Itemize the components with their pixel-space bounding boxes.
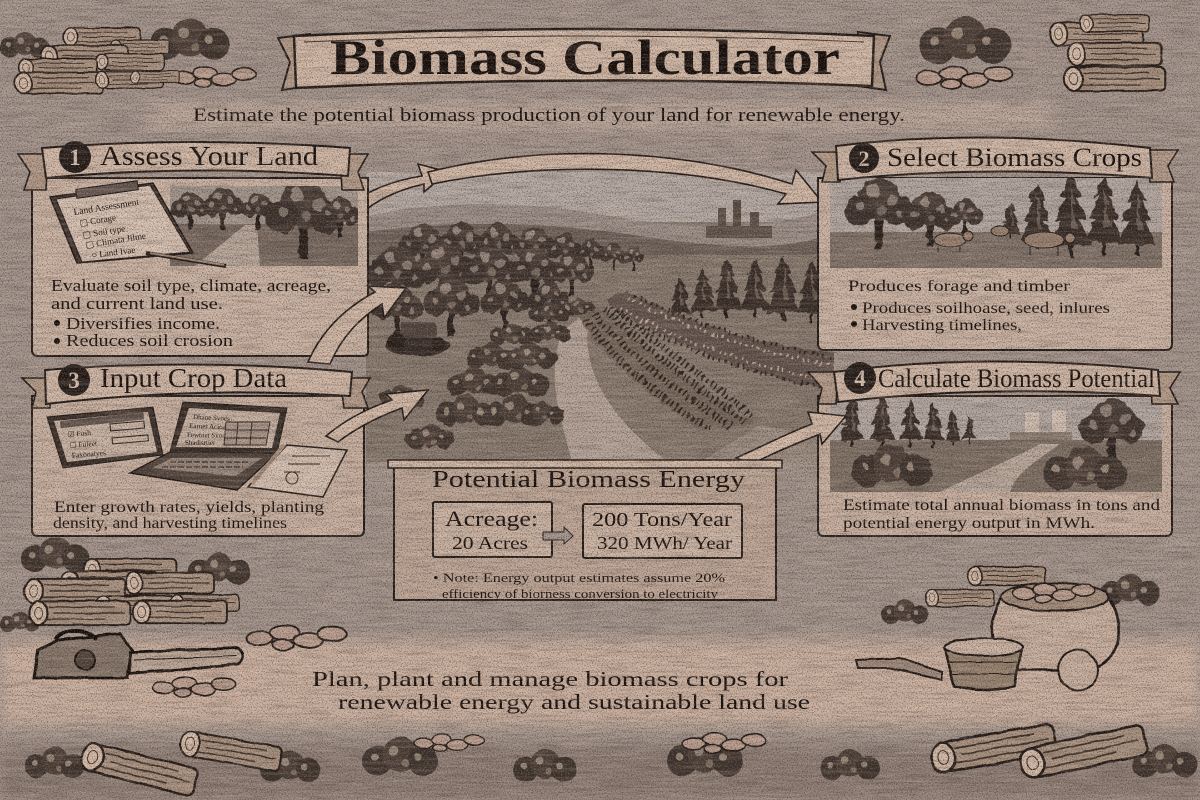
- heading ribbon: step 3: Input Crop Data: [100, 363, 287, 393]
- icon: chainsaw: [34, 631, 243, 678]
- title banner: [278, 29, 890, 90]
- icon: tablet with form: ☐ Fuleet: [69, 439, 98, 450]
- decoration: bottom logs and foliage: [25, 723, 1197, 797]
- title banner: Biomass Calculator: [330, 29, 840, 85]
- icon: clipboard checklist: ○ Land Ivae: [91, 245, 136, 260]
- heading ribbon: step 3: 3: [68, 368, 80, 393]
- heading ribbon: step 1: Assess Your Land: [100, 141, 319, 171]
- card: acreage: 20 Acres: [452, 533, 528, 553]
- farmland ground: [366, 255, 834, 462]
- panel: step 4 calculate biomass potential: [818, 394, 1172, 536]
- icon: clipboard checklist: ▢ Corage: [79, 212, 117, 228]
- orchard rows: [366, 221, 828, 336]
- icon: clipboard checklist: ▢ Soil type: [82, 223, 126, 240]
- closing message: [312, 667, 810, 714]
- arrow: land to landscape: [344, 164, 448, 220]
- icon: clipboard notes: [248, 445, 347, 497]
- crop rows: [436, 290, 834, 430]
- body text: and current land use.: [51, 294, 223, 313]
- basket: [945, 638, 1023, 690]
- heading: Potential Biomass Energy: [432, 467, 745, 493]
- heading ribbon: step 4: [808, 361, 1180, 404]
- power plant: [706, 200, 772, 238]
- note: • Note: Energy output estimates assume 20%: [433, 570, 725, 585]
- card: acreage: Acreage:: [445, 506, 538, 531]
- body text: [843, 497, 1160, 532]
- note: [433, 570, 725, 601]
- central landscape illustration: [366, 172, 834, 462]
- heading ribbon: step 1: 1: [69, 145, 81, 170]
- icon: laptop with spreadsheet: Dhane Svoes: [193, 413, 230, 423]
- card: acreage: [433, 502, 552, 557]
- decoration: sack of wood chips and basket: [856, 567, 1160, 690]
- left foreground shrubs: [380, 385, 454, 449]
- icon: clipboard checklist: ▢ Climata Jilme: [85, 231, 147, 250]
- arrow: crop data to landscape upper: [308, 286, 406, 364]
- body text: Produces forage and timber: [848, 278, 1071, 295]
- heading ribbon: step 4: Calculate Biomass Potential: [878, 364, 1155, 393]
- closing message: Plan, plant and manage biomass crops for: [312, 667, 788, 691]
- body text: Estimate total annual biomass in tons and: [843, 497, 1160, 514]
- sack: [992, 583, 1119, 670]
- heading ribbon: step 4: 4: [854, 366, 866, 391]
- body text: potential energy output in MWh.: [843, 515, 1095, 532]
- card: results: 320 MWh/ Year: [597, 533, 732, 553]
- decoration: stones left: [153, 626, 347, 697]
- body text: density, and harvesting timelines: [53, 515, 287, 532]
- icon: clipboard checklist: Land Assessment: [73, 198, 140, 218]
- decoration: top right logs and foliage: [916, 15, 1165, 91]
- decoration: top left logs and foliage: [0, 19, 256, 94]
- body text: Harvesting timelines,: [862, 317, 1022, 334]
- body text: [51, 276, 331, 350]
- subtitle: Estimate the potential biomass production of your land for renewable energy.: [193, 105, 905, 126]
- body text: [53, 499, 324, 532]
- arrow: landscape to calculate potential: [736, 412, 846, 464]
- body text: [848, 278, 1110, 334]
- panel: step 1 assess your land: [32, 178, 368, 356]
- panel: step 3 input crop data: [32, 396, 364, 536]
- icon: tablet with form: Faxooatyes: [71, 448, 106, 460]
- body text: Enter growth rates, yields, planting: [54, 499, 324, 516]
- arrow: crop data to landscape lower: [326, 390, 428, 442]
- heading ribbon: step 2: Select Biomass Crops: [887, 143, 1142, 172]
- icon: tablet with form: [47, 407, 163, 468]
- panel: potential biomass energy: [388, 460, 782, 601]
- heading ribbon: step 2: [812, 137, 1178, 182]
- icon: laptop with spreadsheet: [130, 402, 287, 490]
- heading ribbon: step 2: 2: [858, 146, 870, 171]
- body text: Produces soilhoase, seed, inlures: [862, 300, 1110, 317]
- arrow: acreage to results: [543, 527, 573, 544]
- note: efficiency of biorness conversion to electricity: [442, 586, 719, 601]
- card: results: [583, 504, 742, 558]
- livestock: [934, 226, 1075, 256]
- icon: clipboard checklist: [50, 181, 226, 266]
- heading ribbon: step 3: [22, 363, 370, 408]
- panel: step 2 select biomass crops: [818, 174, 1172, 350]
- body text: Diversifies income.: [66, 314, 220, 333]
- arrow: long arc to select crops: [428, 154, 822, 204]
- tractor: [386, 322, 450, 356]
- heading ribbon: step 1: [18, 141, 368, 190]
- icon: laptop with spreadsheet: Earner Acioar: [189, 422, 229, 431]
- card: results: 200 Tons/Year: [592, 509, 732, 531]
- icon: tablet with form: ☑ Fush: [67, 428, 92, 439]
- body text: Evaluate soil type, climate, acreage,: [51, 276, 331, 295]
- body text: Reduces soil crosion: [66, 331, 233, 350]
- scene: orchard field: [170, 180, 360, 266]
- scene: bioenergy plant and forest: [830, 394, 1162, 492]
- closing message: renewable energy and sustainable land use: [338, 690, 810, 714]
- decoration: middle left logs and foliage: [0, 537, 250, 632]
- icon: laptop with spreadsheet: Shadisrtier: [185, 439, 216, 447]
- scene: pasture with livestock: [830, 174, 1162, 268]
- icon: laptop with spreadsheet: Fewtnet Svoos: [187, 431, 229, 440]
